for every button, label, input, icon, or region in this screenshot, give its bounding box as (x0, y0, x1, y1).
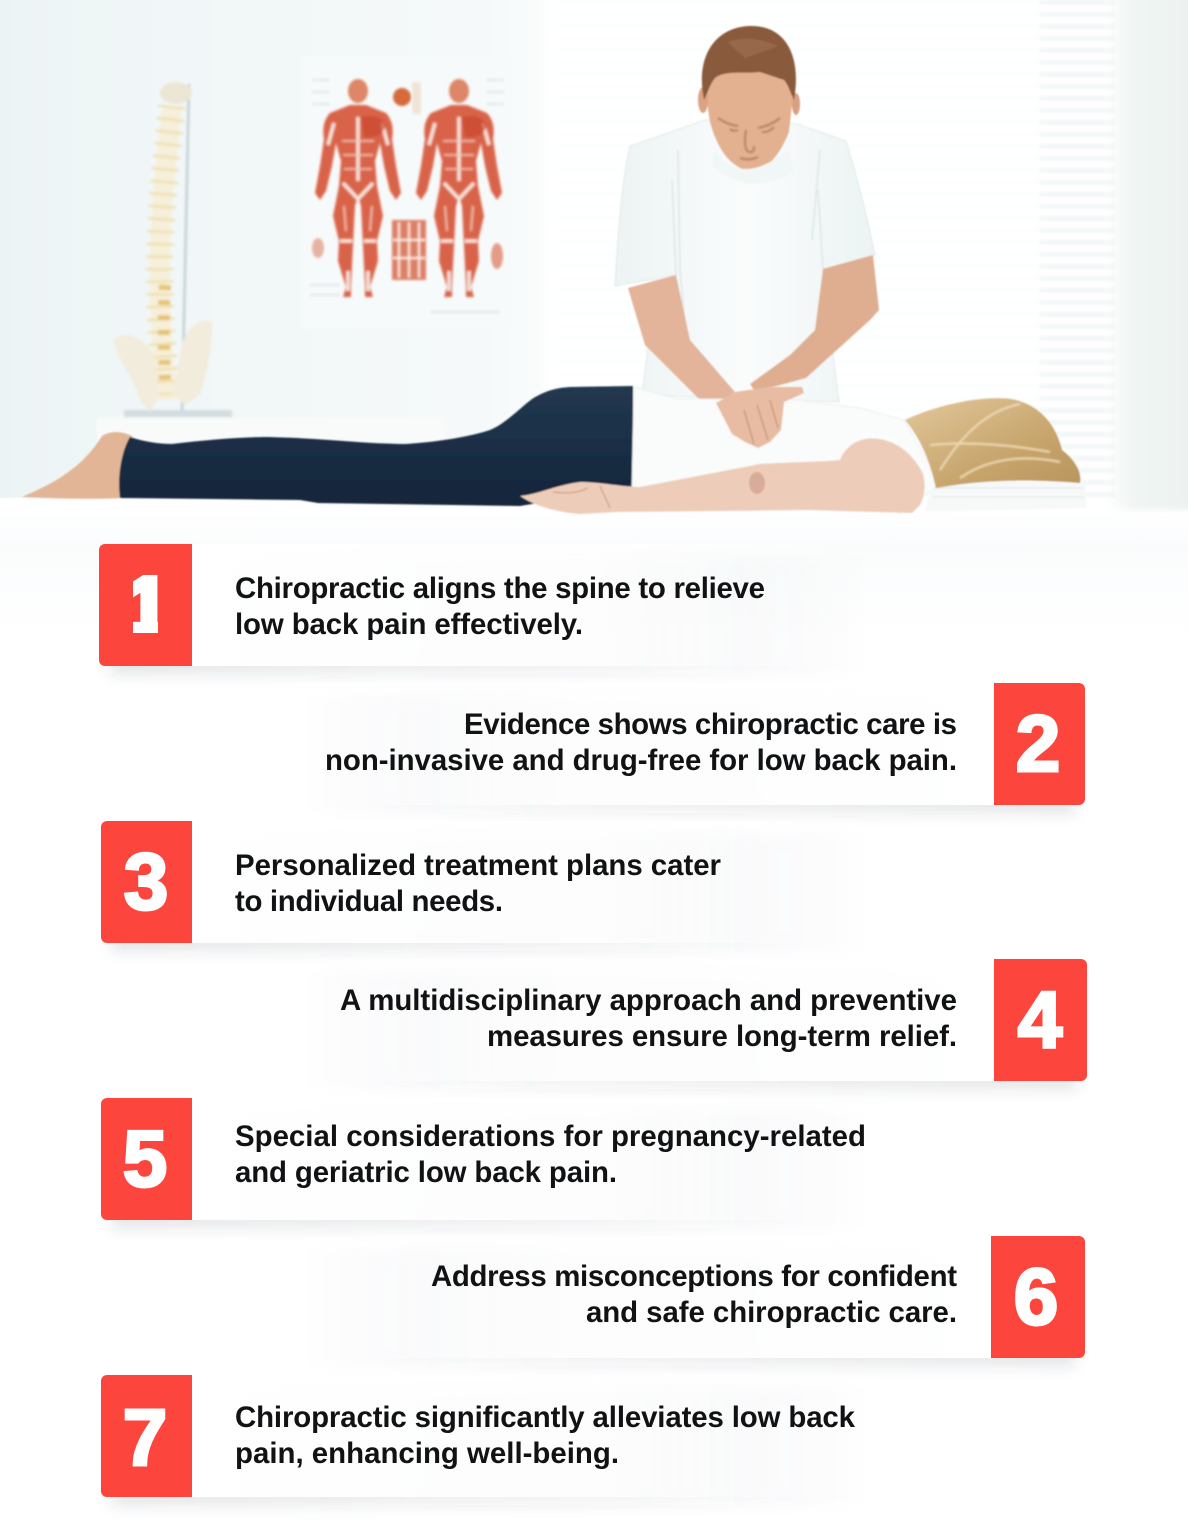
wall left side (0, 0, 546, 510)
number badge 3 (101, 821, 192, 943)
patient (22, 386, 1087, 514)
therapist hand (716, 387, 804, 448)
number badge 7 (101, 1375, 192, 1497)
towel (925, 480, 1087, 512)
left arm (628, 275, 735, 412)
card 4 (290, 959, 1087, 1089)
fade from photo into white (0, 515, 1188, 640)
card 3 text: Personalized treatment plans cater (235, 849, 721, 882)
card 2 text: non-invasive and drug-free for low back pain. (325, 744, 957, 777)
card 2 (290, 683, 1085, 813)
number badge 5 (101, 1098, 192, 1220)
muscle figure back (416, 79, 502, 297)
bed sheet (0, 496, 1188, 640)
card 1 text: low back pain effectively. (235, 608, 583, 641)
card 6 text: Address misconceptions for confident (431, 1260, 957, 1293)
card 2 text: Evidence shows chiropractic care is (464, 708, 957, 741)
card 4 text: A multidisciplinary approach and preventive (340, 984, 957, 1017)
photo: chiropractor treating a patient (0, 0, 1188, 640)
card 5 text: Special considerations for pregnancy-related (235, 1120, 866, 1153)
spine model (113, 82, 232, 417)
number badge 4: 4 (1018, 975, 1063, 1064)
shirt (632, 387, 932, 513)
head (705, 26, 794, 171)
number badge 6 (991, 1236, 1085, 1358)
number badge 1 (99, 544, 192, 666)
right arm (750, 255, 879, 392)
hair (702, 26, 796, 100)
number badge 7: 7 (123, 1393, 167, 1482)
card 7 text: pain, enhancing well-being. (235, 1437, 619, 1470)
card 6 text: and safe chiropractic care. (586, 1296, 957, 1329)
arm and hand (520, 438, 925, 514)
number badge 2: 2 (1016, 699, 1060, 788)
muscle figure front (315, 79, 401, 297)
card 3 text: to individual needs. (235, 885, 503, 918)
side table (97, 418, 445, 442)
anatomy poster (301, 57, 511, 328)
shirt strap (850, 436, 932, 488)
card 1 text: Chiropractic aligns the spine to relieve (235, 572, 765, 605)
number badge 5: 5 (123, 1114, 167, 1203)
collar (712, 150, 794, 183)
number badge 2 (994, 683, 1085, 805)
number badge 1: 1 (125, 561, 169, 650)
hair (905, 398, 1080, 488)
card 6 (290, 1236, 1085, 1366)
feet (22, 432, 134, 499)
chiropractor (615, 26, 879, 412)
jeans (119, 386, 633, 506)
card 7 text: Chiropractic significantly alleviates low back (235, 1401, 856, 1434)
card 5 text: and geriatric low back pain. (235, 1156, 617, 1189)
card 4 text: measures ensure long-term relief. (487, 1020, 957, 1053)
card 3 (101, 821, 872, 951)
number badge 4 (994, 959, 1087, 1081)
number badge 6: 6 (1014, 1252, 1058, 1341)
card 7 (101, 1375, 872, 1505)
card 1 (99, 544, 764, 679)
number badge 3: 3 (124, 837, 168, 926)
coat (615, 120, 875, 402)
card 5 (101, 1098, 872, 1228)
face features (718, 118, 780, 159)
